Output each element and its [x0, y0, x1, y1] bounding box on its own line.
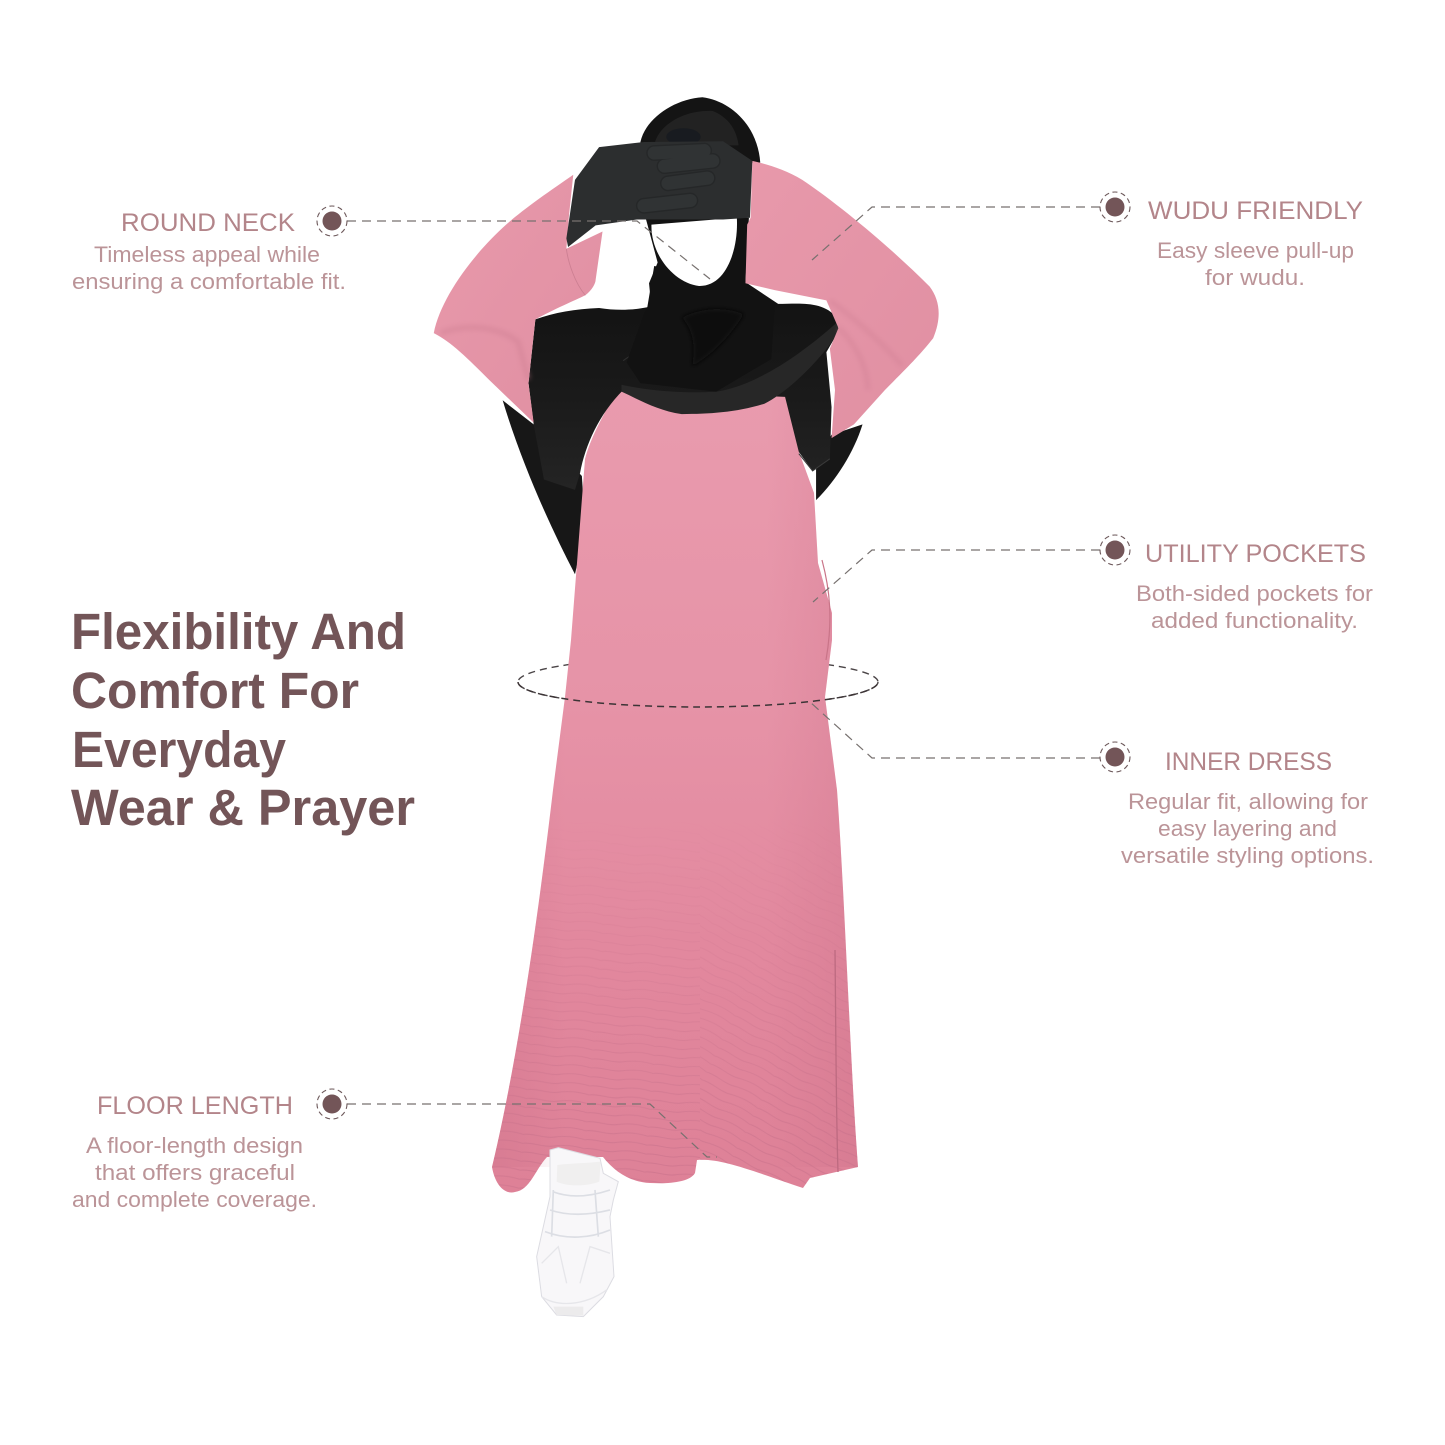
leader line: floor length [347, 1104, 717, 1157]
description: round neck: ensuring a comfortable fit. [72, 269, 346, 294]
product figure: abaya and inner dress [434, 97, 939, 1317]
hood cap [640, 97, 760, 163]
marker: inner dress [1100, 742, 1130, 772]
title: Wear & Prayer [71, 779, 415, 836]
marker: round neck [317, 206, 347, 236]
marker: wudu friendly [1100, 192, 1130, 222]
callout: inner dress [1121, 748, 1374, 868]
description: inner dress [1121, 789, 1374, 868]
right sleeve [745, 161, 939, 438]
gloved hands [566, 141, 752, 247]
waist ellipse front [518, 682, 878, 707]
marker: utility pockets [1100, 535, 1130, 565]
leader line: wudu friendly [812, 207, 1100, 260]
heading: wudu friendly: WUDU FRIENDLY [1148, 197, 1363, 225]
heading: utility pockets: UTILITY POCKETS [1145, 540, 1366, 568]
pink inner dress [480, 380, 870, 1200]
upper garment [434, 97, 939, 490]
description: wudu friendly [1157, 238, 1354, 290]
back black drape [503, 400, 863, 574]
waist ellipse back [518, 657, 878, 707]
heading: round neck: ROUND NECK [121, 209, 295, 237]
description: floor length: and complete coverage. [72, 1187, 317, 1212]
heading: inner dress: INNER DRESS [1165, 748, 1332, 776]
leader line: inner dress [810, 702, 1100, 758]
description: utility pockets: added functionality. [1151, 608, 1358, 633]
leader line: round neck [347, 221, 710, 279]
description: inner dress: easy layering and [1158, 816, 1337, 841]
marker: floor length [317, 1089, 347, 1119]
title [71, 603, 415, 836]
title: Comfort For [71, 662, 359, 719]
callout: utility pockets [1136, 540, 1374, 633]
face cutout [651, 218, 737, 286]
callout: floor length [72, 1092, 317, 1212]
description: inner dress: Regular fit, allowing for [1128, 789, 1369, 814]
heading: floor length: FLOOR LENGTH [97, 1092, 293, 1120]
description: floor length: that offers graceful [95, 1160, 295, 1185]
left sleeve [434, 175, 603, 423]
description: inner dress: versatile styling options. [1121, 843, 1374, 868]
title: Everyday [72, 721, 287, 778]
title: Flexibility And [71, 603, 406, 660]
callout: round neck [72, 209, 346, 294]
description: round neck [72, 242, 346, 294]
hijab [627, 218, 775, 392]
description: utility pockets: Both-sided pockets for [1136, 581, 1374, 606]
description: floor length [72, 1133, 317, 1212]
description: wudu friendly: for wudu. [1205, 265, 1305, 290]
description: utility pockets [1136, 581, 1374, 633]
scarf band [621, 323, 839, 414]
description: round neck: Timeless appeal while [94, 242, 320, 267]
white sneaker [537, 1148, 618, 1317]
description: floor length: A floor-length design [86, 1133, 303, 1158]
leader line: utility pockets [813, 550, 1100, 602]
black shawl drape [528, 266, 838, 490]
description: wudu friendly: Easy sleeve pull-up [1157, 238, 1354, 263]
callout: wudu friendly [1148, 197, 1363, 290]
